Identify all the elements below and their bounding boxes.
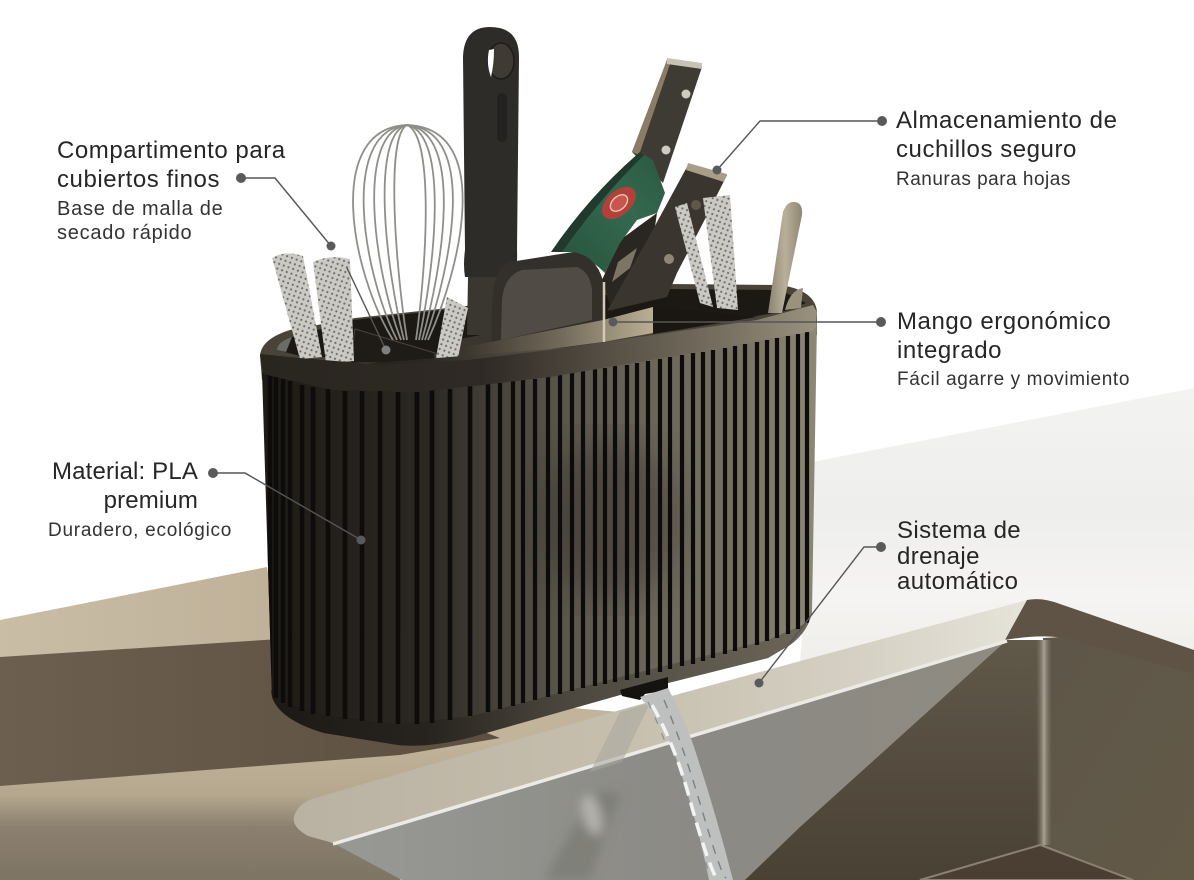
utensil: whisk: [353, 125, 463, 340]
callout: knife storage: [896, 107, 1117, 190]
callout leader lines: [213, 121, 882, 683]
drain spout: [620, 677, 668, 700]
callout: PLA material: [48, 458, 232, 541]
callout: ergonomic handle: integrado: [897, 337, 1002, 364]
compartment left divider: [350, 329, 435, 363]
counter shadow: [0, 639, 500, 786]
product ribbed body: [262, 322, 817, 746]
callout: cutlery compartment: Base de malla de: [57, 198, 224, 220]
lower countertop: [0, 700, 620, 880]
callout: cutlery compartment: Compartimento para: [57, 137, 286, 164]
inner left wall highlight: [277, 337, 292, 352]
callout: ergonomic handle: [897, 308, 1130, 390]
body base band: [271, 612, 812, 746]
utensil: mid knife: [602, 213, 657, 312]
product opening: [277, 289, 806, 360]
callout dots: [208, 116, 887, 688]
body centre shading: [540, 440, 680, 600]
compartment right: [653, 307, 757, 334]
bright wall and counter plane: [800, 388, 1194, 665]
callout: drainage system: Sistema de: [897, 517, 1021, 544]
water stream: [640, 688, 733, 880]
utensil: dark knife handle: [632, 58, 702, 183]
callout: cutlery compartment: secado rápido: [57, 222, 192, 244]
callout: PLA material: premium: [104, 487, 198, 514]
callout: drainage system: automático: [897, 568, 1018, 595]
callout: cutlery compartment: [57, 137, 286, 244]
countertop: [0, 567, 290, 880]
callout: drainage system: drenaje: [897, 542, 980, 570]
basin corner highlight: [1036, 640, 1052, 845]
callout: ergonomic handle: Fácil agarre y movimiento: [897, 369, 1130, 390]
utensil: second knife: [607, 163, 727, 311]
callout: PLA material: Duradero, ecológico: [48, 520, 232, 541]
utensil: green knife: [551, 152, 665, 273]
callout: cutlery compartment: cubiertos finos: [57, 166, 220, 193]
integrated handle: [460, 252, 653, 360]
callout: PLA material: Material: PLA: [52, 458, 198, 485]
basin left wall: [333, 640, 1043, 880]
body vertical slots: [270, 332, 807, 724]
basin floor: [920, 845, 1133, 880]
basin top highlight: [333, 641, 1007, 844]
utensil: hammered handles left: [272, 253, 468, 363]
callout: knife storage: Almacenamiento de: [896, 107, 1117, 134]
callout: knife storage: cuchillos seguro: [896, 136, 1077, 163]
compartment centre block: [435, 333, 492, 360]
reflection of water in basin: [545, 790, 622, 880]
product outer top shell: [260, 284, 817, 380]
sink right rim: [1005, 599, 1194, 675]
basin right wall: [1043, 637, 1194, 880]
sink stone rim: [294, 600, 1027, 843]
utensil: spoon and small spoon: [768, 202, 803, 313]
product front rim: [260, 305, 817, 392]
basin shaded wall: [745, 640, 1043, 880]
callout: ergonomic handle: Mango ergonómico: [897, 308, 1111, 335]
reflection of water on rim: [590, 703, 650, 772]
callout: drainage system: [897, 517, 1021, 595]
utensil: hammered blades right: [675, 195, 738, 310]
callout: knife storage: Ranuras para hojas: [896, 169, 1071, 190]
utensil: black long handle: [463, 27, 519, 335]
